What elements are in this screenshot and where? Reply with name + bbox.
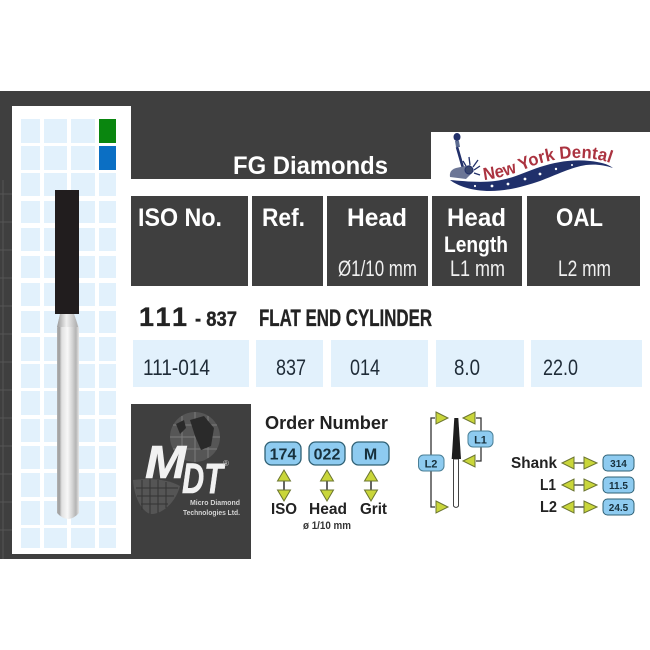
cell: Head length: 8.0 — [454, 355, 480, 380]
product title — [139, 302, 432, 332]
label: L1: L1 — [474, 434, 487, 446]
MDT wordmark: DT — [182, 455, 226, 503]
labels: ISO, Head, Grit — [271, 501, 388, 518]
dimension arrowheads — [436, 412, 475, 513]
labels: ISO, Head, Grit: ISO — [271, 501, 297, 518]
globe icon — [170, 412, 220, 462]
MDT wordmark: ® — [223, 459, 229, 468]
label: L2: L2 — [425, 458, 437, 470]
banner swoosh with stars — [450, 160, 613, 191]
labels: ISO, Head, Grit: Grit — [360, 501, 388, 518]
statue of liberty — [450, 133, 480, 179]
product title: FLAT END CYLINDER — [259, 305, 432, 332]
header: Ref.: Ref. — [262, 204, 305, 232]
cell: Head length — [436, 340, 524, 387]
grit colour swatch: blue — [99, 146, 116, 170]
logo: New York Dental — [450, 133, 614, 191]
cell: ISO number — [133, 340, 249, 387]
row labels: L2 — [540, 499, 557, 516]
cell: OAL — [531, 340, 642, 387]
value: 314: 314 — [610, 459, 627, 470]
panel: MDT logo — [131, 404, 251, 559]
logo wordmark: New York Dental — [483, 146, 614, 180]
product title: - 837 — [195, 308, 237, 331]
cell: Head: 014 — [350, 355, 380, 380]
faint grid pattern on left edge — [0, 180, 12, 559]
value: 11.5: 11.5 — [609, 481, 628, 492]
header: Head: Head — [347, 204, 407, 232]
MDT tagline: Micro Diamond — [190, 500, 240, 507]
header: Ref. — [252, 196, 323, 286]
left panel: bur illustration — [12, 106, 131, 554]
grit colour swatch: green — [99, 119, 116, 143]
bur shank — [57, 314, 79, 519]
heading: FG Diamonds: FG Diamonds — [233, 152, 388, 180]
header: Head: Ø1/10 mm — [338, 256, 417, 281]
small bur head — [452, 418, 461, 459]
table header row — [131, 196, 640, 286]
bur diamond head — [55, 190, 79, 314]
MDT tagline: Technologies Ltd. — [183, 510, 240, 517]
header: Head Length: Head — [447, 204, 506, 232]
value: 24.5: 24.5 — [609, 503, 629, 514]
pill: 174: 174 — [270, 446, 296, 464]
row arrows — [562, 457, 597, 513]
pill: M: M — [364, 446, 377, 464]
MDT wordmark — [145, 436, 229, 503]
heading: FG Diamonds — [131, 132, 431, 180]
cell: Head — [331, 340, 428, 387]
small bur shank — [454, 459, 458, 508]
diagram: bur dimensions — [418, 412, 493, 513]
cell: Ref — [256, 340, 323, 387]
note: diameter unit: ø 1/10 mm — [303, 520, 351, 532]
header: OAL: L2 mm — [558, 256, 611, 281]
header: OAL: OAL — [556, 204, 603, 232]
pill: 022: 022 — [314, 446, 340, 464]
cell: Ref: 837 — [276, 355, 306, 380]
header: Head Length — [432, 196, 522, 286]
header: Head Length: L1 mm — [450, 256, 505, 281]
bracket lines — [431, 418, 481, 507]
MDT tagline — [183, 500, 240, 517]
cell: ISO number: 111-014 — [143, 355, 210, 380]
cell: OAL: 22.0 — [543, 355, 578, 380]
product title: 111 — [139, 302, 187, 332]
labels: ISO, Head, Grit: Head — [309, 501, 347, 518]
legend: shank, L1, L2 sizes — [511, 455, 634, 516]
heading: Order Number: Order Number — [265, 412, 388, 433]
grid of pale blue cells — [21, 119, 116, 548]
table data row — [133, 340, 642, 387]
row labels: Shank — [511, 455, 557, 472]
arrows: pill to label — [278, 470, 378, 501]
row labels — [511, 455, 557, 516]
header: ISO No. — [131, 196, 248, 286]
header: Head Length: Length — [444, 232, 508, 257]
lower globe grid — [133, 479, 180, 514]
header: ISO No.: ISO No. — [138, 204, 222, 232]
MDT wordmark: M — [145, 436, 188, 488]
dark background frame — [0, 91, 650, 559]
panel: order number legend — [265, 412, 389, 532]
header: Head — [327, 196, 428, 286]
header: OAL — [527, 196, 640, 286]
row labels: L1 — [540, 477, 556, 494]
